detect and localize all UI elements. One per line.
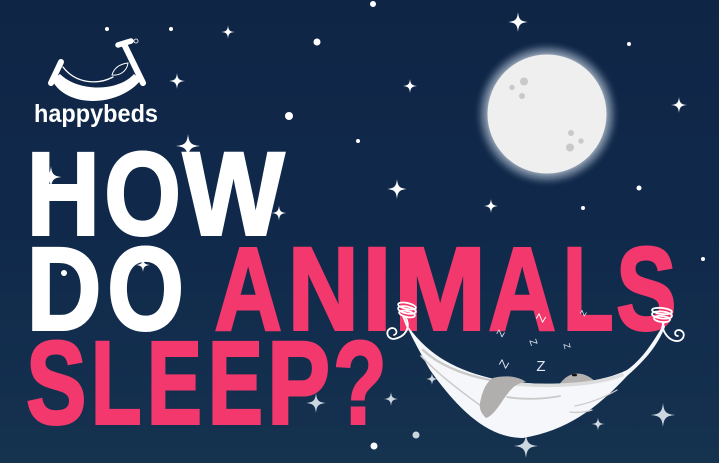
sleep Z letters: Z [536,358,546,375]
title line 2 white [27,223,184,355]
title line 3 [26,316,387,450]
title line 2 white: D [27,223,101,355]
title line 1: O [104,129,181,261]
logo: happybeds [34,39,158,128]
moon [473,40,621,188]
title line 3: E [147,317,202,449]
sleep Z letters: Z [578,309,589,318]
title line 1: H [27,129,100,260]
title line 2 pink: I [363,224,391,355]
title line 2 white: O [107,224,184,355]
hammock fold shadows [421,350,622,412]
title line 1 [27,128,285,261]
sleep Z letters: Z [561,342,573,350]
title line 2 pink: N [288,223,359,354]
sleep Z letters: Z [526,338,539,347]
title line 2 pink: M [394,223,486,355]
animal nose [572,374,577,376]
title line 3: E [208,317,263,449]
title line 2 pink [214,223,676,355]
title line 3: P [267,316,330,449]
left rope and curl [387,301,417,339]
title line 2 pink: L [563,223,613,355]
title: How do animals sleep? [26,128,676,450]
title line 2 pink: S [616,224,676,355]
animal arm [480,376,526,418]
sleep Z letters: Z [533,311,549,325]
title line 2 pink: A [488,223,556,355]
logo wordmark: happybeds [34,100,158,128]
right rope and curl [652,307,684,341]
logo icon: smile hammock [51,39,143,101]
sleep Z letters [495,309,589,375]
title line 3: S [26,318,86,449]
title line 3: ? [333,318,387,450]
stars over title [40,134,326,413]
moon craters [509,78,584,152]
title line 3: L [91,317,141,449]
sleep Z letters: Z [495,328,508,339]
sleeping animal head [558,374,598,386]
title line 2 pink: A [214,223,282,355]
title line 1: W [183,128,285,260]
sleep Z letters: Z [496,357,512,371]
hammock fabric [405,322,665,438]
hammock with sleeping animal [387,301,684,438]
